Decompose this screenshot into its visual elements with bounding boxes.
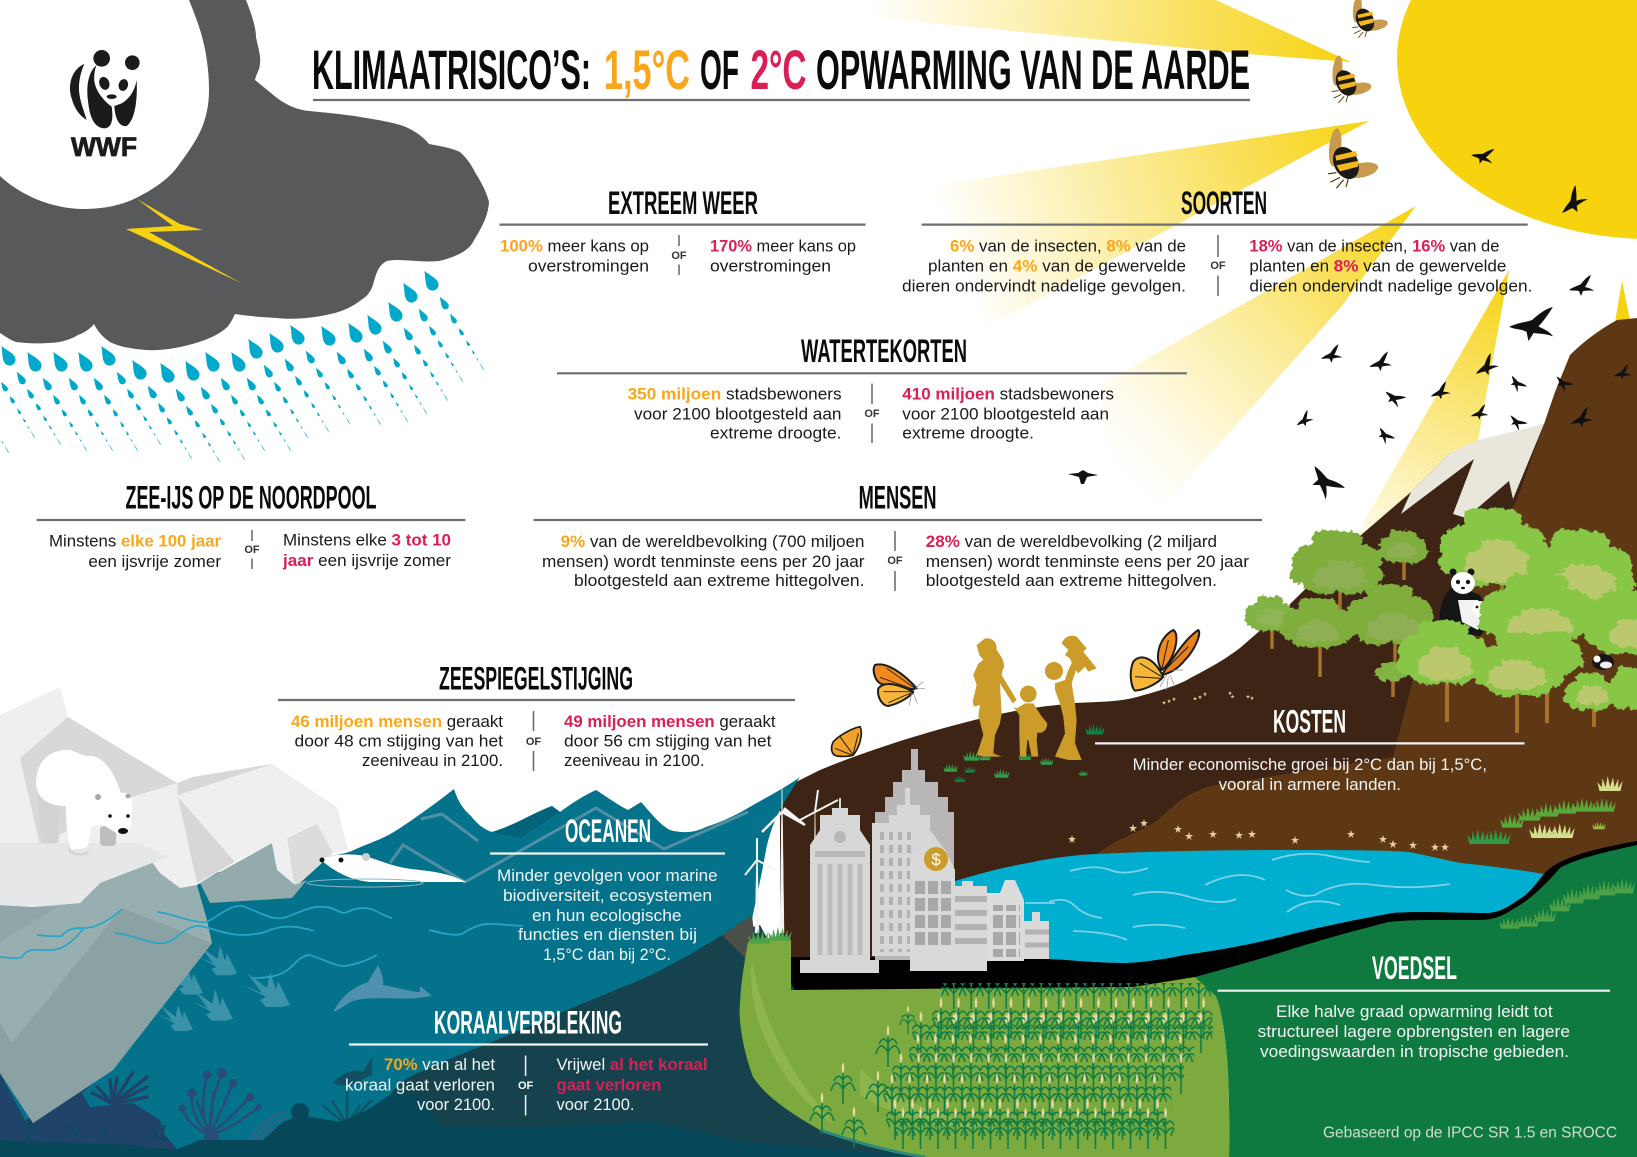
wwf logo: WWF [71, 132, 137, 162]
mountain reflection [722, 915, 756, 958]
text: 1,5 degree sea level: door 48 cm stijging van het [294, 732, 503, 750]
text: 2 degree sea level: 49 miljoen mensen geraakt [564, 713, 776, 731]
panel: oceanen [490, 813, 725, 964]
coral silhouettes [0, 1057, 930, 1157]
panel: zeespiegelstijging [278, 661, 795, 771]
polar bear swimming [307, 853, 466, 887]
island green field [740, 938, 1229, 1157]
text: 1,5 degree drought: extreme droogte. [710, 424, 842, 442]
small panda [1592, 654, 1614, 670]
lake [955, 850, 1544, 963]
text: 2 degree sea ice: jaar een ijsvrije zomer [282, 552, 452, 570]
text: 2 degree heatwaves [926, 533, 1250, 590]
text: 1,5 degree flood risk: overstromingen [528, 258, 649, 276]
text: 1,5 degree flood risk [500, 238, 649, 276]
deep water [320, 925, 930, 1157]
text: costs: vooral in armere landen. [1219, 776, 1401, 794]
city [800, 749, 1049, 973]
text: 2 degree drought: voor 2100 blootgesteld aan [902, 406, 1109, 424]
text: 2 degree sea ice: Minstens elke 3 tot 10 [283, 532, 451, 550]
heading: mensen: MENSEN [859, 480, 937, 516]
of divider: OF [671, 250, 687, 262]
dolphin [333, 965, 432, 1012]
dark green field [1195, 843, 1637, 1157]
text: 2 degree coral: gaat verloren [556, 1076, 662, 1094]
text: 1,5 degree drought: voor 2100 blootgesteld aan [634, 406, 842, 424]
panel: soorten [902, 185, 1532, 296]
text: oceans: 1,5°C dan bij 2°C. [543, 946, 671, 964]
text: 2 degree coral: voor 2100. [556, 1096, 634, 1114]
land: dark brown hill [780, 424, 1570, 1000]
text: 1,5 degree sea level [291, 713, 503, 770]
heading: watertekorten: WATERTEKORTEN [801, 333, 967, 369]
heading: zeespiegelstijging: ZEESPIEGELSTIJGING [439, 661, 633, 697]
text: food: Elke halve graad opwarming leidt tot [1276, 1003, 1553, 1021]
text: 2 degree species [1249, 238, 1532, 296]
text: 1,5 degree drought [628, 386, 842, 442]
text: 2 degree sea level: zeeniveau in 2100. [564, 752, 704, 770]
butterfly small [832, 727, 861, 756]
sun [1397, 0, 1637, 239]
text: 2 degree species: dieren ondervindt nadelige gevolgen. [1249, 278, 1532, 296]
text: 2 degree sea level: door 56 cm stijging van het [564, 732, 772, 750]
text: 1,5 degree heatwaves: 9% van de wereldbevolking (700 miljoen [561, 533, 864, 551]
title: KLIMAATRISICO’S: [312, 38, 591, 101]
of divider: OF [518, 1080, 534, 1092]
polar bear on ice [36, 750, 132, 856]
heading: koraalverbleking: KORAALVERBLEKING [434, 1004, 622, 1040]
family silhouette [973, 636, 1097, 760]
text: 2 degree drought: 410 miljoen stadsbewoners [902, 386, 1114, 404]
heading: extreem weer: EXTREEM WEER [608, 185, 758, 221]
rain [0, 268, 490, 466]
dollar coin: $ [931, 850, 941, 869]
text: 2 degree heatwaves: 28% van de wereldbevolking (2 miljard [926, 533, 1217, 551]
wind turbines [745, 779, 838, 933]
ocean back waves [390, 806, 748, 882]
panda in tree [1439, 568, 1498, 636]
of divider [518, 1056, 534, 1116]
grass at turbines [748, 927, 792, 944]
text: 1,5 degree coral: koraal gaat verloren [345, 1076, 495, 1094]
title: OF [700, 38, 739, 101]
grass on green field [1499, 877, 1635, 929]
text: 1,5 degree species: planten en 4% van de gewervelde [928, 258, 1186, 276]
text: 1,5 degree sea ice: een ijsvrije zomer [88, 553, 222, 571]
text: 2 degree heatwaves: mensen) wordt tenminste eens per 20 jaar [926, 553, 1250, 571]
corn stray plants [810, 1005, 916, 1148]
wwf logo [70, 50, 140, 162]
panel: extreem weer [500, 185, 866, 276]
text: costs [1133, 756, 1487, 794]
of divider: OF [1210, 260, 1226, 272]
sea floor mound [0, 1073, 178, 1150]
text: 2 degree heatwaves: blootgesteld aan extreme hittegolven. [926, 572, 1217, 590]
text: 2 degree species: 18% van de insecten, 16% van de [1249, 238, 1499, 256]
text: 1,5 degree species [902, 238, 1186, 296]
text: 2 degree drought [902, 386, 1114, 442]
text: 2 degree coral: Vrijwel al het koraal [556, 1056, 708, 1074]
dollar coin [924, 847, 948, 871]
text: 1,5 degree heatwaves: mensen) wordt tenminste eens per 20 jaar [542, 553, 865, 571]
text: oceans: functies en diensten bij [518, 926, 697, 944]
corn field [883, 983, 1213, 1152]
text: 1,5 degree flood risk: 100% meer kans op [500, 238, 649, 256]
sun rays [860, 0, 1634, 600]
birds on mountain [1553, 364, 1632, 429]
bees [1327, 0, 1389, 188]
mountain snow [1401, 424, 1544, 518]
text: 1,5 degree coral: 70% van al het [384, 1056, 495, 1074]
text: 2 degree species: planten en 8% van de gewervelde [1249, 258, 1506, 276]
birds [1068, 142, 1594, 502]
panel: koraalverbleking [345, 1004, 708, 1116]
of divider [1210, 235, 1226, 296]
of divider [887, 531, 903, 591]
storm cloud [0, 0, 489, 350]
iceberg underwater [0, 843, 307, 1123]
panel: voedsel [1218, 950, 1610, 1061]
text: oceans: biodiversiteit, ecosystemen [503, 887, 712, 905]
title: OPWARMING VAN DE AARDE [816, 38, 1250, 101]
ocean [0, 777, 800, 1157]
text: 1,5 degree species: 6% van de insecten, 8% van de [950, 238, 1186, 256]
text: 1,5 degree sea ice: Minstens elke 100 jaar [49, 532, 222, 550]
text: 1,5 degree heatwaves [542, 533, 865, 590]
text: 2 degree flood risk: overstromingen [710, 258, 831, 276]
black shoreline [791, 841, 1637, 990]
of divider: OF [526, 736, 541, 748]
title: 2°C [750, 38, 806, 101]
panel: zee-ijs op de noordpool [37, 480, 465, 571]
title [312, 38, 1250, 101]
text: 1,5 degree sea level: zeeniveau in 2100. [362, 752, 503, 770]
text: 1,5 degree coral: voor 2100. [417, 1096, 495, 1114]
iceberg above water [0, 687, 348, 907]
source note: Gebaseerd op de IPCC SR 1.5 en SROCC [1323, 1125, 1617, 1142]
text: 2 degree flood risk [710, 238, 856, 276]
fish school [158, 945, 290, 1031]
text: 1,5 degree drought: 350 miljoen stadsbewoners [628, 386, 842, 404]
forest back trees [1244, 507, 1635, 697]
of divider [671, 235, 687, 275]
title: 1,5°C [604, 38, 690, 101]
text: food [1258, 1003, 1570, 1061]
of divider: OF [864, 408, 880, 420]
heading: kosten: KOSTEN [1273, 704, 1346, 740]
text: food: structureel lagere opbrengsten en lagere [1258, 1023, 1570, 1041]
of divider [864, 384, 880, 443]
panel: watertekorten [557, 333, 1187, 443]
of divider: OF [244, 544, 260, 556]
text: 1,5 degree species: dieren ondervindt nadelige gevolgen. [902, 278, 1186, 296]
text: 1,5 degree sea ice [49, 532, 222, 571]
of divider: OF [887, 555, 903, 567]
panel: kosten [1095, 704, 1524, 794]
lightning bolt [126, 199, 241, 283]
land: light brown mountain [1096, 318, 1637, 900]
text: oceans: Minder gevolgen voor marine [497, 867, 718, 885]
heading: zee-ijs: ZEE-IJS OP DE NOORDPOOL [126, 480, 376, 516]
text: 1,5 degree coral [345, 1056, 495, 1114]
text: 2 degree sea ice [282, 532, 452, 570]
text: 2 degree flood risk: 170% meer kans op [710, 238, 856, 256]
butterfly large [1131, 630, 1199, 691]
heading: voedsel: VOEDSEL [1372, 950, 1457, 986]
butterflies [832, 630, 1199, 756]
text: 2 degree coral [556, 1056, 708, 1114]
island light swoosh [751, 960, 1000, 1157]
heading: soorten: SOORTEN [1181, 185, 1267, 221]
text: 2 degree drought: extreme droogte. [902, 424, 1034, 442]
heading: oceanen: OCEANEN [565, 813, 651, 849]
text: 1,5 degree sea level: 46 miljoen mensen geraakt [291, 713, 503, 731]
panel: mensen [534, 480, 1262, 591]
forest front trees [1396, 573, 1637, 733]
ocean surface waves [0, 906, 523, 978]
text: oceans [497, 867, 718, 964]
text: oceans: en hun ecologische [532, 907, 682, 925]
of divider [244, 530, 260, 569]
of divider [526, 711, 541, 771]
text: costs: Minder economische groei bij 2°C dan bij 1,5°C, [1133, 756, 1487, 774]
text: 2 degree sea level [564, 713, 776, 770]
text: food: voedingswaarden in tropische gebieden. [1260, 1043, 1569, 1061]
grass and flowers on hill [943, 691, 1623, 851]
butterfly medium [874, 664, 925, 706]
text: 1,5 degree heatwaves: blootgesteld aan extreme hittegolven. [574, 572, 864, 590]
